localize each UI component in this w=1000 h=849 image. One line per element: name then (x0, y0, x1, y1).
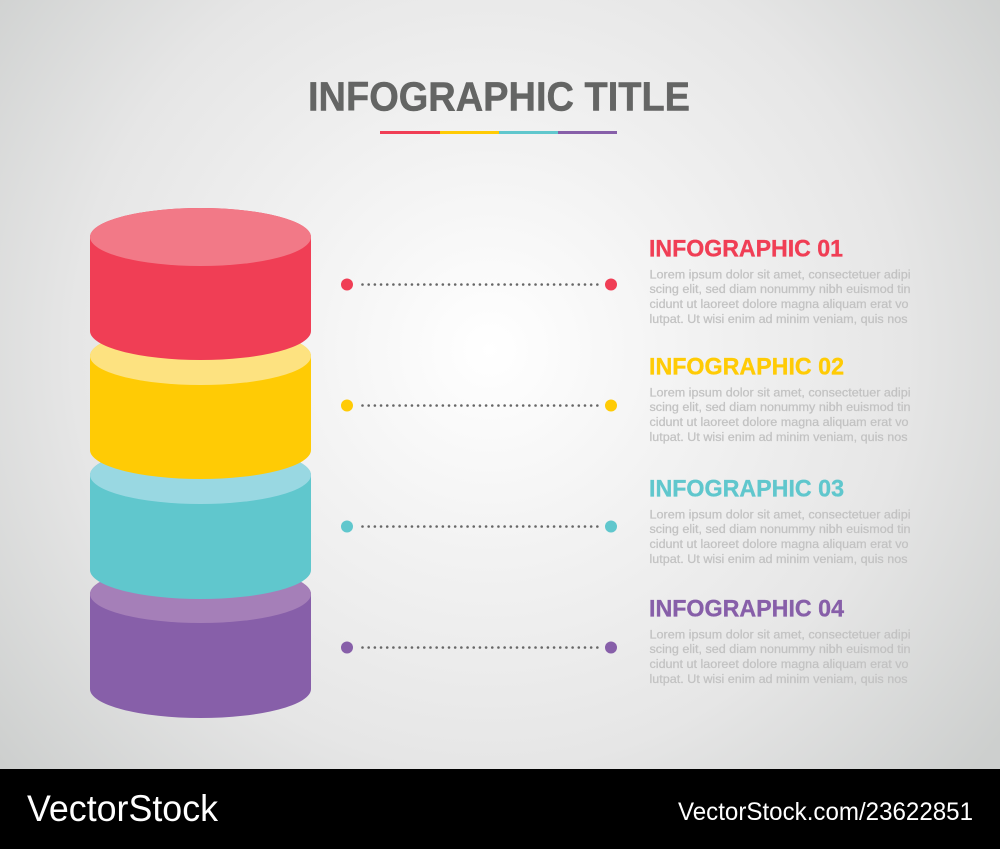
text block 4: scing elit, sed diam nonummy nibh euismod tin (650, 642, 911, 656)
text block 4: INFOGRAPHIC 04 (649, 596, 845, 622)
text block 1: lutpat. Ut wisi enim ad minim veniam, quis nos (650, 312, 908, 326)
text block 1: cidunt ut laoreet dolore magna aliquam erat vo (650, 297, 909, 311)
footer url: VectorStock.com/23622851 (678, 798, 973, 826)
text block 3 (649, 476, 911, 566)
stacked cylinder (90, 208, 311, 718)
text block 3: lutpat. Ut wisi enim ad minim veniam, quis nos (650, 552, 908, 566)
layer 3: teal (90, 446, 311, 599)
text block 1: INFOGRAPHIC 01 (649, 236, 843, 262)
text block 2: scing elit, sed diam nonummy nibh euismod tin (650, 400, 911, 414)
text block 2: Lorem ipsum dolor sit amet, consectetuer adipi (650, 386, 910, 400)
connector 3 (341, 520, 617, 532)
text block 1 (649, 236, 911, 326)
text block 1: scing elit, sed diam nonummy nibh euismod tin (650, 282, 911, 296)
text block 1: Lorem ipsum dolor sit amet, consectetuer adipi (650, 268, 910, 282)
text block 4: Lorem ipsum dolor sit amet, consectetuer adipi (650, 628, 910, 642)
text block 4 (649, 596, 911, 686)
text block 2: lutpat. Ut wisi enim ad minim veniam, quis nos (650, 430, 908, 444)
text block 3: Lorem ipsum dolor sit amet, consectetuer adipi (650, 508, 910, 522)
footer logo: VectorStock (27, 788, 218, 829)
layer 4: purple (90, 565, 311, 718)
text block 3: cidunt ut laoreet dolore magna aliquam erat vo (650, 537, 909, 551)
text block 3: scing elit, sed diam nonummy nibh euismod tin (650, 522, 911, 536)
text block 4: lutpat. Ut wisi enim ad minim veniam, quis nos (650, 672, 908, 686)
footer bar (0, 769, 1000, 849)
text block 2: INFOGRAPHIC 02 (649, 354, 844, 380)
title underline (380, 131, 617, 134)
text block 3: INFOGRAPHIC 03 (649, 476, 844, 502)
text block 2 (649, 354, 911, 444)
title: INFOGRAPHIC TITLE (308, 74, 690, 120)
connector 2 (341, 400, 617, 412)
connector 1 (341, 278, 617, 290)
layer 1: red (90, 208, 311, 360)
layer 2: yellow (90, 327, 311, 479)
text block 2: cidunt ut laoreet dolore magna aliquam erat vo (650, 415, 909, 429)
text block 4: cidunt ut laoreet dolore magna aliquam erat vo (650, 657, 909, 671)
connector 4 (341, 642, 617, 654)
